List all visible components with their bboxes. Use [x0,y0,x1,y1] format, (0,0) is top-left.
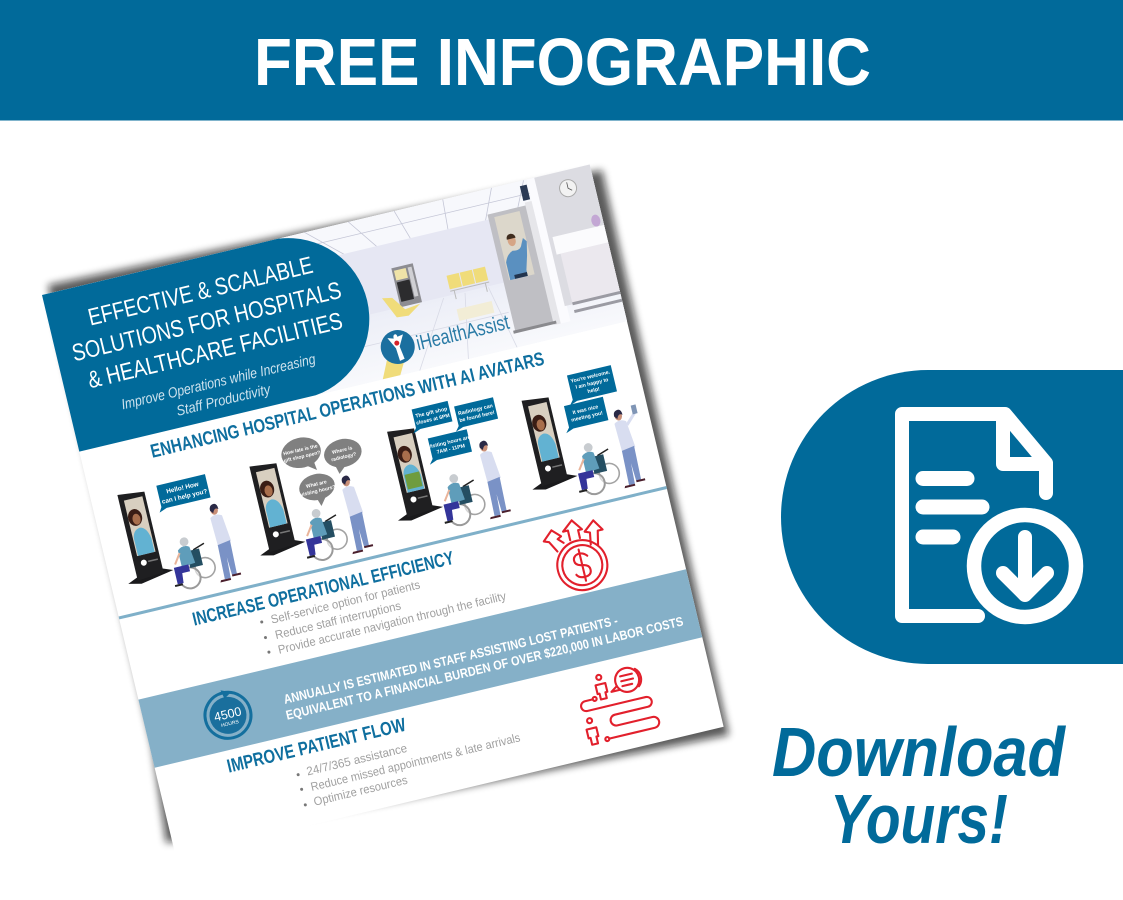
yellow chairs [363,266,505,379]
speech bubbles: help! [587,386,601,395]
speech bubbles: gift shop open? [283,450,321,464]
speech bubbles: You're welcome. [570,369,611,385]
speech bubble: Hello! How [166,481,199,495]
subheading: Improve Operations while Increasing [120,352,317,413]
page shadow [48,170,729,843]
subheading [120,352,322,432]
speech bubbles [408,390,505,467]
iHealthAssist logo: iHealthAssist [414,311,512,355]
icon: patient flow path [575,663,661,745]
speech bubbles: How late is the [283,443,318,457]
band text: EQUIVALENT TO A FINANCIAL BURDEN OF OVER $220,000 IN LABOR COSTS [284,613,685,723]
icon: wall clock [558,178,578,198]
vending machine [391,263,422,307]
speech bubbles [553,365,624,433]
icon: 4500 hours [200,685,256,743]
speech bubbles: meeting you! [571,410,604,424]
speech bubbles: It was nice [572,404,599,416]
phone in hand [625,413,637,425]
scene 1: greeting [108,471,242,603]
bullet list: patient flow: 24/7/365 assistance [305,741,409,778]
title: FREE INFOGRAPHIC [254,25,871,100]
speech bubbles: Radiology can [458,403,493,417]
headline: SOLUTIONS FOR HOSPITALS [69,277,344,367]
hospital lobby photo [42,165,627,452]
speech bubbles: I am happy to [575,377,609,391]
heading: increase operational efficiency: INCREASE OPERATIONAL EFFICIENCY [191,548,456,631]
avatar kiosk in photo [481,184,561,335]
panel: download capsule [781,370,1123,664]
iHealthAssist logo [377,304,513,367]
call to action: Yours! [830,780,1008,858]
scene 2: questions [236,424,385,575]
bullet list: efficiency [259,559,507,659]
subheading: Staff Productivity [175,382,273,420]
tilted infographic page [42,165,724,857]
header panel [42,222,386,452]
headline [62,247,351,396]
bullet list: efficiency: Provide accurate navigation through the facility [277,589,507,657]
title banner [0,0,1123,120]
call to action [772,713,1066,858]
speech bubble [153,474,211,513]
bullet list: efficiency: Reduce staff interruptions [274,599,402,642]
call to action: Download [772,713,1066,791]
scene 3: answers [374,390,520,540]
band text: ANNUALLY IS ESTIMATED IN STAFF ASSISTING LOST PATIENTS - [282,613,619,707]
speech bubbles: radiology? [331,452,357,463]
speech bubbles: 7AM - 11PM [436,443,466,456]
map on kiosk screen [405,471,423,489]
headline: EFFECTIVE & SCALABLE [86,252,316,331]
icon: dollar with rising arrows [541,514,615,597]
speech bubble: can I help you? [161,488,208,506]
speech bubbles: What are [305,479,328,490]
headline: & HEALTHCARE FACILITIES [85,308,345,394]
speech bubbles: closes at 6PM [416,413,450,427]
reception desk [550,213,622,314]
speech bubbles [278,424,372,512]
bullet list: efficiency: Self-service option for patients [269,578,421,627]
stat band [138,569,702,768]
speech bubbles: visiting hours? [300,484,336,498]
icon: 4500 hours: HOURS [221,719,240,729]
bullet list: patient flow: Reduce missed appointments & late arrivals [309,730,522,794]
scene 4: farewell [509,362,654,509]
icon: document with download arrow [902,414,1076,617]
bullet list: patient flow: Optimize resources [312,773,409,809]
speech bubbles: Where is [331,445,353,456]
heading: improve patient flow: IMPROVE PATIENT FLOW [225,715,408,778]
speech bubbles: be found here! [459,410,496,424]
bullet list: patient flow [295,715,525,811]
speech bubbles: Visiting hours are [427,435,471,451]
heading: enhancing hospital operations: ENHANCING HOSPITAL OPERATIONS WITH AI AVATARS [149,349,546,463]
divider [119,487,667,618]
speech bubbles: The gift shop [415,406,448,420]
icon: 4500 hours: 4500 [213,704,243,724]
